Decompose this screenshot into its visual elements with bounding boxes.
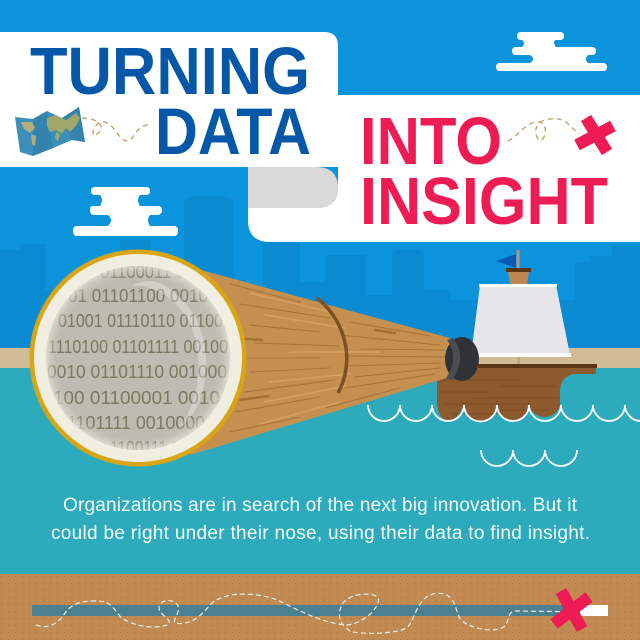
crow's nest <box>506 268 531 285</box>
lens glass <box>46 266 230 450</box>
binary text in lens: 01100011 0 <box>100 262 185 282</box>
cloud top right <box>496 32 607 71</box>
icon: folded world map <box>15 107 85 156</box>
heading: turning: TURNING <box>30 34 310 109</box>
title banner: into insight <box>248 95 640 242</box>
binary text in lens: 1110100 01101111 00100 <box>48 337 228 357</box>
body text: Organizations are in search of the next big innovation. But it <box>63 495 578 516</box>
sandy ground <box>0 574 640 640</box>
body text: could be right under their nose, using their data to find insight. <box>51 523 590 544</box>
wooden telescope barrel <box>190 267 450 455</box>
heading: data: DATA <box>155 94 311 168</box>
dashed trail from map <box>82 118 150 141</box>
binary text in lens: 1101111 0010000 <box>67 413 205 433</box>
lens gold rim <box>30 250 246 466</box>
title banner: turning data <box>0 32 338 167</box>
binary text in lens <box>47 262 228 458</box>
ship flag and mast <box>496 250 520 270</box>
heading: insight: INSIGHT <box>360 164 608 239</box>
telescope eyepiece ring <box>445 337 479 381</box>
ship hull <box>437 364 597 422</box>
icon: red x on route <box>554 591 589 629</box>
telescope <box>30 250 479 466</box>
lens cream ring <box>34 254 242 462</box>
dashed route <box>36 593 567 633</box>
binary text in lens: 100 01100001 0010 <box>53 388 220 408</box>
telescope band <box>317 298 347 393</box>
sea <box>0 368 640 574</box>
binary text in lens: 01001 01110110 01100 <box>58 311 223 331</box>
binary text in lens: 01 01101100 0010 <box>68 286 208 306</box>
lens glare <box>46 266 230 450</box>
city skyline <box>0 196 640 348</box>
sail <box>470 284 571 365</box>
beach strip <box>0 348 640 369</box>
waves second row <box>481 450 577 466</box>
sailing ship <box>437 250 597 422</box>
dashed trail to x mark <box>508 119 579 141</box>
icon: red x mark <box>577 118 613 152</box>
wood grain <box>230 284 445 432</box>
scroll curl <box>248 167 338 208</box>
binary text in lens: 1100111 0 <box>110 438 180 458</box>
heading: into: INTO <box>360 104 502 179</box>
progress bar track <box>32 605 580 616</box>
cloud left <box>73 187 178 236</box>
body text <box>51 495 590 544</box>
binary text in lens: 0010 01101110 001000 <box>47 362 227 382</box>
waves front row <box>368 405 640 422</box>
progress bar remainder <box>580 605 608 616</box>
